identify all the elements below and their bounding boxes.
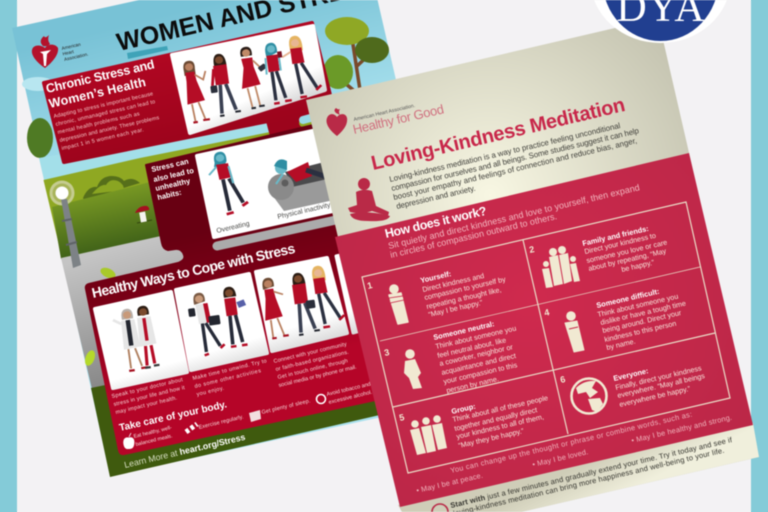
panel: chronic stress (44, 23, 340, 162)
scene: clouds and trees (22, 17, 389, 158)
number: 1 (366, 280, 373, 291)
text: chronic stress body: depression and anxiety. These problems (59, 115, 160, 144)
text: together and equally direct (453, 405, 538, 433)
caption: connect with your community: Get in touch online, through (277, 358, 348, 381)
sky background (12, 0, 460, 476)
bushes (83, 176, 140, 200)
cell 5: group (398, 393, 549, 455)
icon: difficult person (565, 311, 584, 352)
icon: person hugging self (389, 284, 408, 324)
heading: stress can also lead to unhealthy habits: Stress can (150, 157, 190, 174)
text (612, 363, 706, 409)
text: intro paragraph: boost your empathy and feelings of connection and reduce bias, anger, (392, 136, 638, 202)
title: Loving-Kindness Meditation: Loving-Kindness Meditation (369, 94, 627, 175)
text: about by repeating, “May (587, 246, 667, 273)
icon: three people (410, 415, 447, 455)
text: repeating a thought like, (425, 285, 502, 311)
text: exercise: Exercise regularly. (198, 414, 245, 431)
text: change the phrase: • May I be at peace. (415, 471, 484, 495)
figure: woman in red dress (181, 59, 212, 123)
number: 4 (543, 307, 550, 318)
street lamp (50, 180, 81, 268)
poster: Loving-Kindness Meditation (306, 18, 759, 512)
text: eat healthy (133, 425, 173, 448)
text: your kindness to all of them, (455, 412, 545, 441)
caption: overeating: Overeating (216, 221, 250, 235)
card: make time to unwind (176, 274, 267, 370)
grey pill (217, 218, 345, 246)
badge: DYA logo (590, 0, 730, 43)
text: feel neutral about, like (436, 335, 507, 360)
text: sleep: Get plenty of sleep. (261, 398, 312, 416)
icon: globe (572, 378, 606, 414)
text: your compassion to this (442, 360, 518, 386)
caption: make time to unwind: Make time to unwind. Try to (192, 358, 267, 382)
beige sheet (306, 18, 759, 512)
text: change the phrase: You can change up the thought or phrase or combine words, such as: (449, 410, 693, 475)
heading: How does it work?: How does it work? (384, 204, 488, 241)
right teal border (751, 0, 768, 512)
caption: speak to your doctor (111, 377, 186, 416)
light blue river strip with rounded end (39, 118, 275, 180)
figure: doctor one (112, 307, 148, 372)
heading: stress can also lead to unhealthy habits: habits: (156, 188, 182, 202)
text: dislike or have a tough time (599, 298, 687, 327)
figure: woman with headphones (186, 290, 226, 357)
cell 1: yourself (366, 269, 507, 324)
figure: blonde woman with phone (275, 33, 323, 100)
caption: connect with your community (273, 342, 358, 389)
text: Someone neutral: (432, 319, 495, 342)
text: how it works intro: in circles of compassion outward to others. (389, 211, 558, 260)
text: intro paragraph: Loving-kindness meditation is a way to practice feeling unconditional (388, 121, 621, 184)
number: 5 (398, 412, 405, 423)
text: acquaintance and direct (440, 351, 517, 377)
caption: connect with your community: social media or by phone or mail. (278, 364, 358, 389)
text: “May I be happy.” (427, 298, 484, 319)
text: how it works intro: Sit quietly and direct kindness and love to yourself, then expand (387, 182, 641, 251)
text: being around. Direct your (601, 308, 683, 335)
text: someone you love or care (585, 238, 668, 265)
logo: American Heart Association: Heart (62, 49, 75, 56)
icon: family group (542, 246, 580, 288)
logo: American Heart Association: American (61, 42, 82, 51)
logo: Healthy for Good: American Heart Association. (353, 103, 416, 123)
text: kindness to this person (603, 319, 677, 344)
text: chronic stress body: impact 1 in 5 women each year. (61, 127, 145, 152)
text: change the phrase (415, 410, 733, 495)
card: unhealthy habits (197, 125, 360, 237)
mushroom (135, 206, 152, 223)
heading: stress can also lead to unhealthy habits (150, 157, 195, 202)
figure: woman with bag and jacket (290, 271, 320, 335)
icon: bed (249, 410, 261, 422)
text: Someone difficult: (595, 287, 660, 310)
heading: Take care of your body: Take care of your body. (118, 399, 228, 434)
card: group of five women (172, 26, 325, 133)
text: start with a few minutes: Start with just a few minutes and gradually extend your time. Try it today and see if (449, 435, 734, 510)
caption: speak to your doctor: Speak to your doctor about (111, 377, 184, 400)
text: avoid tobacco: excessive alcohol. (328, 390, 373, 406)
left teal border (0, 0, 17, 512)
figure: teal stressed woman (262, 41, 292, 104)
small olive pill (303, 117, 325, 123)
title accent bar (127, 46, 168, 59)
figure: woman lying on a sofa (268, 158, 352, 211)
text: change the phrase: • May I be healthy and strong. (630, 413, 733, 445)
figure: blonde woman on phone (311, 263, 346, 328)
icon: neutral person (404, 349, 422, 389)
icon: clock (432, 504, 448, 512)
text: “May they be happy.” (457, 426, 525, 450)
caption: speak to your doctor: may impact your health. (115, 395, 178, 416)
text (450, 393, 549, 450)
text: chronic stress body: mental health problems such as (57, 111, 141, 136)
icon: dumbbell (186, 424, 197, 432)
text: a coworker, neighbor or (438, 342, 514, 368)
caption: connect with your community: or faith-based organizations. (275, 349, 350, 373)
icon: no smoking (316, 394, 326, 404)
text: person by name. (445, 374, 500, 395)
number: 6 (559, 374, 566, 385)
text: Think about all of these people (451, 393, 549, 424)
grid frame (362, 202, 730, 473)
cell 3: someone neutral (383, 319, 518, 395)
text: by name. (605, 337, 636, 352)
number: 3 (383, 347, 390, 358)
text: Finally, direct your kindness (614, 363, 703, 392)
text (419, 269, 507, 319)
text: intro paragraph: compassion for ourselves and all beings. Some studies suggest it can help (390, 126, 640, 193)
figure: doctor two (134, 305, 160, 368)
bottom beige strip (398, 423, 759, 512)
figure: woman with bag (206, 52, 241, 117)
hedge (52, 182, 170, 259)
card: partial fourth card (336, 246, 400, 333)
figure: woman reading (222, 285, 252, 347)
text: chronic stress body: Adapting to stress is important because (53, 91, 154, 120)
text: change the phrase: • May I be loved. (531, 447, 589, 469)
text: everywhere be happy.” (618, 384, 692, 409)
text: eat healthy: balanced meals. (135, 433, 173, 448)
text: avoid tobacco: Avoid tobacco and (326, 382, 371, 398)
text: be happy.” (620, 258, 656, 274)
text: compassion to yourself by (423, 274, 507, 302)
leaves (83, 266, 117, 367)
cell 4: someone difficult (543, 287, 687, 352)
card: connect with your community (256, 258, 347, 351)
cell 2: family and friends (528, 224, 668, 288)
heading: stress can also lead to unhealthy habits: unhealthy (154, 176, 192, 193)
text: chronic stress body: chronic, unmanaged stress can lead to (55, 99, 156, 128)
text (432, 319, 518, 395)
text: Think about someone you (434, 324, 517, 351)
road (61, 190, 440, 389)
olive lawn top (44, 132, 276, 258)
text: Group: (450, 402, 476, 416)
figure: woman in dress waving (259, 276, 289, 339)
figure: overeating woman (206, 149, 249, 216)
text: Think about someone you (596, 292, 679, 319)
figure: woman with purse (236, 44, 273, 109)
text: Yourself: (419, 269, 452, 285)
text: chronic stress body (53, 91, 160, 152)
text (581, 224, 668, 274)
text: Direct your kindness to (583, 231, 657, 256)
text: Everyone: (612, 366, 649, 383)
caption: make time to unwind: do some other activities (194, 368, 262, 390)
panel: healthy ways and unhealthy habits (86, 121, 445, 454)
logo: American Heart Association (32, 35, 89, 68)
logo: Healthy for Good: Healthy for Good (351, 101, 445, 137)
dark green ground (91, 320, 445, 477)
logo: American Heart Association: Association. (64, 52, 89, 62)
caption: speak to your doctor: stress in your life and how it (113, 385, 186, 408)
heading: stress can also lead to unhealthy habits: also lead to (152, 166, 195, 184)
number: 2 (528, 244, 535, 255)
text: learn more link: Learn More at heart.org/Stress (123, 432, 246, 470)
caption: physical inactivity: Physical inactivity (277, 202, 332, 221)
text: eat healthy: Eat healthy, well- (133, 425, 173, 440)
text: Direct kindness and (421, 271, 485, 294)
caption: make time to unwind (192, 358, 267, 398)
heading: Chronic Stress and Women's Health: Women’s Health (48, 75, 147, 111)
crimson section (335, 153, 753, 507)
small blue pill (303, 114, 325, 120)
text: avoid tobacco (326, 382, 373, 406)
caption: connect with your community: Connect with your community (273, 342, 348, 365)
cell 6: everyone (559, 363, 706, 414)
text: intro paragraph: depression and anxiety. (395, 184, 476, 211)
heading: Chronic Stress and Women's Health: Chronic Stress and (45, 57, 156, 96)
card: speak to your doctor (95, 292, 187, 388)
heading: Healthy Ways to Cope with Stress: Healthy Ways to Cope with Stress (90, 240, 297, 301)
poster: Women and Stress (12, 0, 460, 477)
text: everywhere. “May all beings (616, 371, 706, 400)
caption: make time to unwind: you enjoy. (196, 385, 225, 398)
text (595, 287, 687, 352)
icon: meditating figure (348, 178, 390, 221)
text: Family and friends: (581, 224, 649, 248)
icon: apple (124, 433, 134, 449)
